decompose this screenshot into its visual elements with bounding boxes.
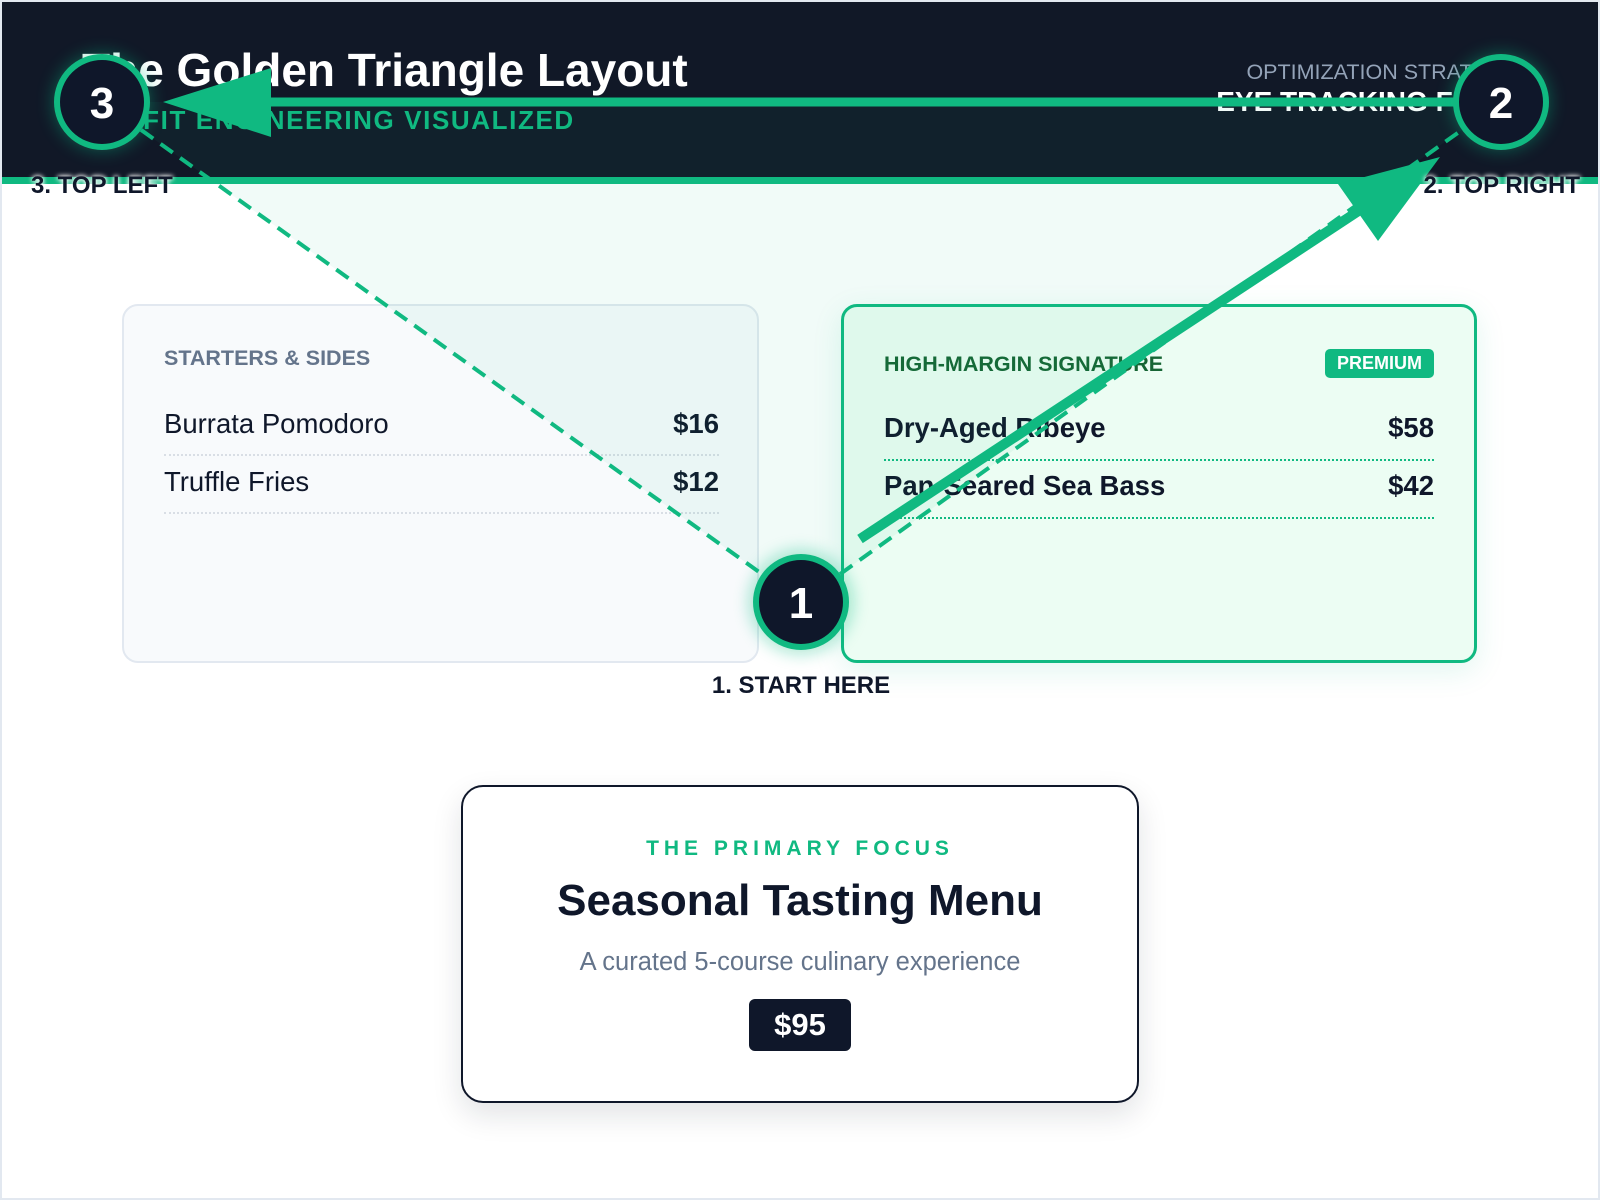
price badge: $95 [774,1007,826,1042]
panel: starters [122,304,759,663]
arrow: 1 to 2 [860,157,1440,539]
item: sea bass: $42 [1388,470,1434,501]
item: fries: $12 [673,466,719,497]
circle 2: 2 [1489,79,1513,128]
item: fries: Truffle Fries [164,466,309,497]
item: ribeye: Dry-Aged Ribeye [884,412,1106,443]
label: top left: 3. TOP LEFT [31,172,173,199]
item: ribeye [884,412,1434,461]
card subtitle: A curated 5-course culinary experience [580,948,1020,976]
item: burrata [164,408,719,456]
price badge [749,999,851,1051]
arrow: 2 to 3 [163,68,1455,137]
header right text: EYE TRACKING FLOW [1216,86,1518,117]
item: sea bass: Pan-Seared Sea Bass [884,470,1165,501]
header [2,2,1598,184]
card: primary focus [461,785,1139,1103]
circle 3: 3 [90,79,114,128]
dashed path [102,102,1501,602]
title: The Golden Triangle Layout [82,44,688,96]
panel: signature [841,304,1477,663]
circle 2 [1451,52,1551,152]
subtitle: PROFIT ENGINEERING VISUALIZED [82,105,575,135]
panel heading: STARTERS & SIDES [164,346,370,370]
circle 1 [749,550,853,654]
header right text: OPTIMIZATION STRATEGY [1246,60,1518,84]
eyebrow: THE PRIMARY FOCUS [646,837,954,860]
circle 1: 1 [789,579,813,628]
badge: premium: PREMIUM [1337,353,1422,373]
triangle zone [102,102,1501,602]
card title: Seasonal Tasting Menu [557,876,1043,925]
label: start here: 1. START HERE [712,672,890,699]
item: fries [164,466,719,514]
item: burrata: Burrata Pomodoro [164,408,389,439]
header right text [1216,60,1518,117]
item: sea bass [884,470,1434,519]
circle 3 [52,52,152,152]
badge: premium [1325,349,1434,378]
panel heading: HIGH-MARGIN SIGNATURE [884,352,1163,376]
item: ribeye: $58 [1388,412,1434,443]
item: burrata: $16 [673,408,719,439]
label: top right: 2. TOP RIGHT [1424,172,1580,199]
